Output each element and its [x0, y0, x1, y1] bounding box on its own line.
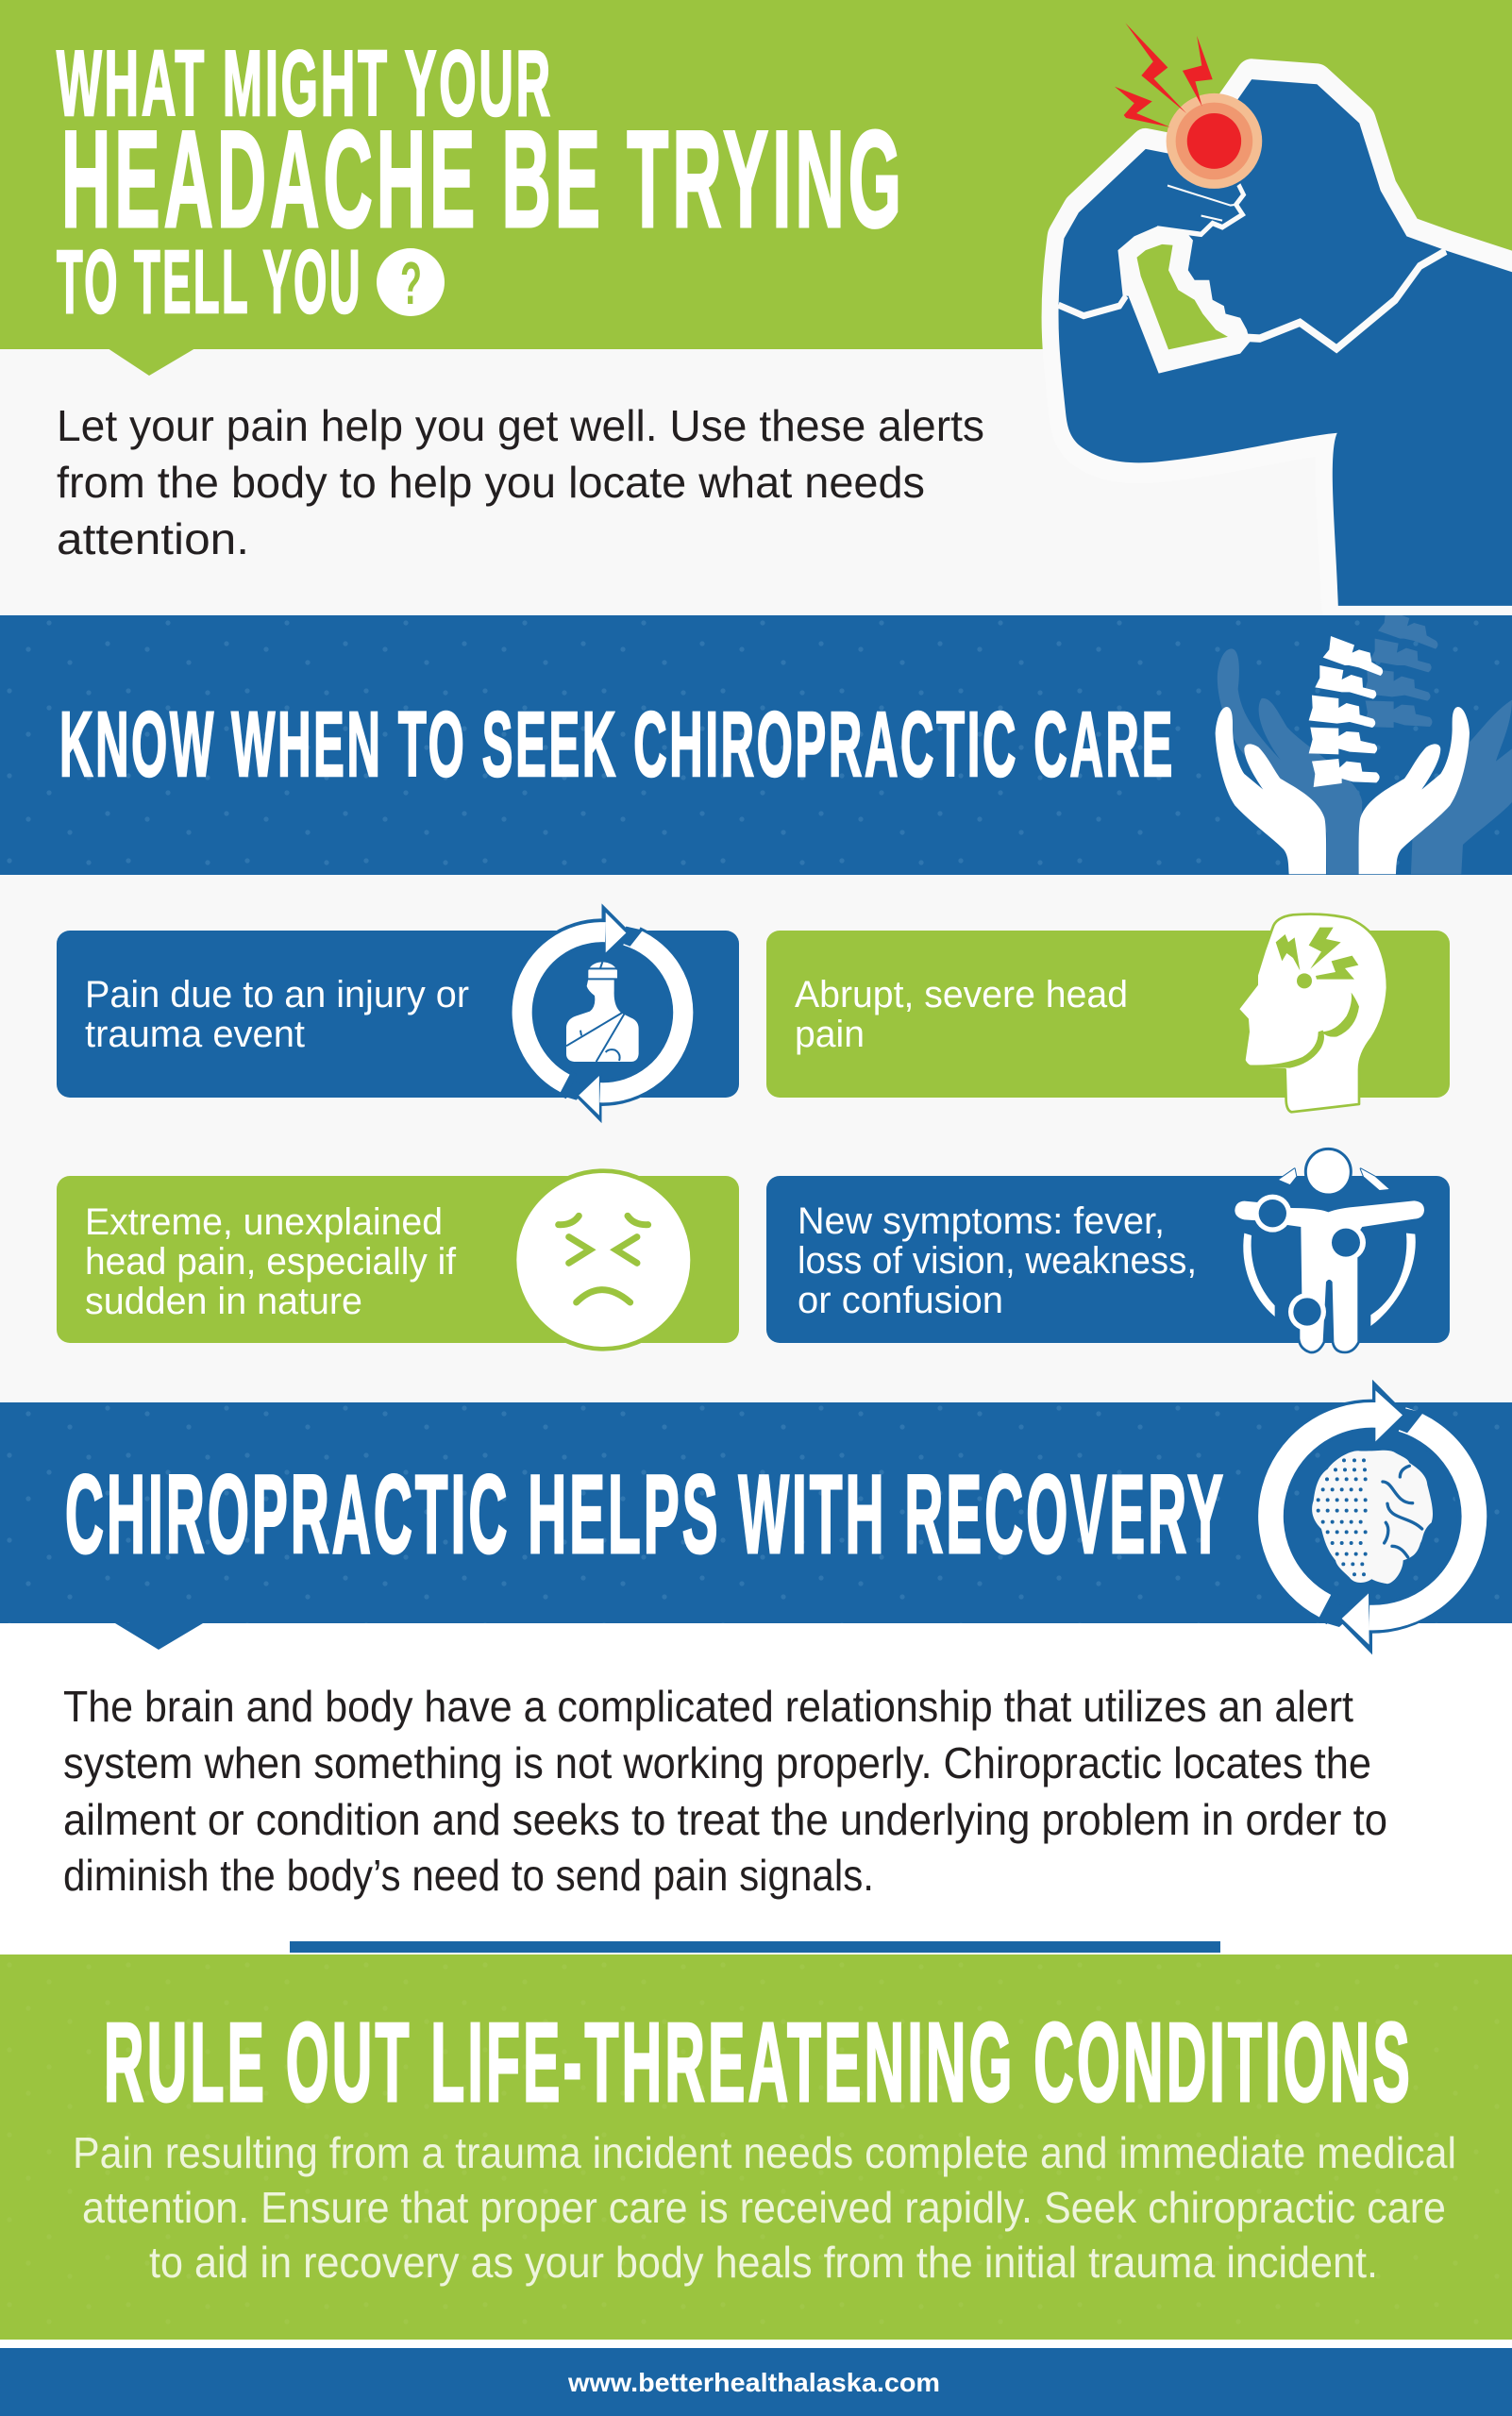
green gap interior	[1137, 244, 1228, 349]
card: pain due to an injury: trauma event	[85, 1014, 305, 1055]
panel: header	[0, 0, 1512, 376]
wrist line	[1059, 296, 1126, 316]
card: extreme unexplained head pain: head pain, especially if	[85, 1241, 457, 1283]
icon: head with pain bolts	[1238, 914, 1387, 1112]
ghost spine	[1364, 610, 1437, 728]
card: new symptoms: New symptoms: fever,	[798, 1200, 1165, 1242]
title	[57, 31, 905, 332]
card: abrupt severe head pain: pain	[795, 1014, 865, 1055]
recovery paragraph	[63, 1682, 1387, 1900]
icon: brain in cycle	[1270, 1380, 1474, 1654]
icon: question mark: ?	[400, 249, 422, 317]
icon: body with pain points	[1235, 1149, 1424, 1351]
card: new symptoms: or confusion	[798, 1280, 1003, 1321]
recovery paragraph: ailment or condition and seeks to treat the underlying problem in order to	[63, 1795, 1387, 1844]
panel: rule out conditions	[0, 1955, 1512, 2340]
card: pain due to an injury: Pain due to an injury or	[85, 974, 469, 1015]
panel: recovery band	[0, 1402, 1512, 1623]
footer url: www.betterhealthalaska.com	[567, 2368, 940, 2397]
recovery paragraph: The brain and body have a complicated relationship that utilizes an alert	[63, 1682, 1353, 1731]
gap between arm and face	[1117, 226, 1250, 374]
card: new symptoms	[766, 1176, 1450, 1343]
panel: recovery text background	[0, 1623, 1512, 1955]
card: abrupt severe head pain	[766, 931, 1450, 1098]
rule out paragraph: to aid in recovery as your body heals from the initial trauma incident.	[149, 2238, 1378, 2287]
icon: question mark	[377, 248, 445, 317]
finger lines	[1157, 185, 1244, 234]
pain spot	[1167, 93, 1262, 189]
title: TO TELL YOU	[57, 232, 362, 332]
panel: know when band	[0, 615, 1512, 875]
left hand	[1216, 707, 1326, 874]
recovery paragraph: system when something is not working properly. Chiropractic locates the	[63, 1738, 1371, 1787]
recovery paragraph: diminish the body’s need to send pain signals.	[63, 1851, 874, 1900]
right hand	[1359, 707, 1470, 874]
pain bolts	[1115, 23, 1213, 127]
rule out paragraph: attention. Ensure that proper care is received rapidly. Seek chiropractic care	[82, 2183, 1446, 2232]
icon: sad face	[514, 1171, 693, 1349]
icon: hands holding spine	[1216, 610, 1512, 874]
card: extreme unexplained head pain: sudden in nature	[85, 1281, 362, 1322]
icon: injured person in cycle	[522, 903, 683, 1123]
card: extreme unexplained head pain: Extreme, unexplained	[85, 1201, 443, 1243]
title: WHAT MIGHT YOUR	[57, 31, 553, 135]
card: new symptoms: loss of vision, weakness,	[798, 1240, 1197, 1282]
body silhouette	[1059, 79, 1512, 606]
ghost hands	[1218, 648, 1512, 874]
card: abrupt severe head pain: Abrupt, severe head	[795, 974, 1128, 1015]
intro text: Let your pain help you get well. Use these alerts	[57, 401, 984, 450]
white spine	[1309, 636, 1383, 787]
intro text: from the body to help you locate what needs	[57, 458, 925, 507]
card: pain due to an injury	[57, 931, 739, 1098]
cheek and shoulder line	[1245, 251, 1446, 349]
card: extreme unexplained head pain	[57, 1176, 739, 1343]
intro text	[57, 401, 984, 563]
panel: footer	[0, 2340, 1512, 2416]
intro text: attention.	[57, 514, 249, 563]
rule out paragraph	[73, 2128, 1456, 2287]
icon: person holding head in pain	[1059, 23, 1512, 606]
